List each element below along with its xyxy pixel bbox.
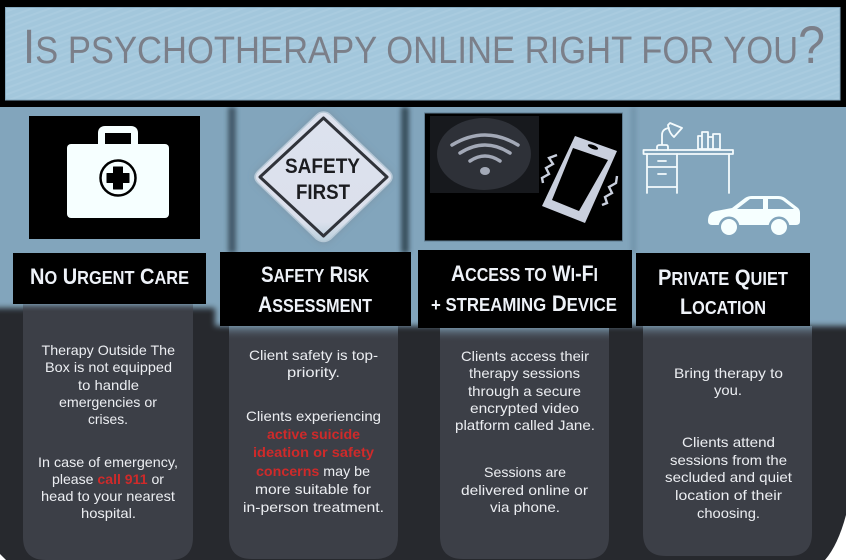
title banner [0, 0, 846, 107]
heading: no urgent care: NO URGENT CARE [30, 264, 189, 289]
heading: safety risk assessment: SAFETY RISK [261, 262, 369, 287]
body card: no urgent care: Therapy Outside The [42, 343, 175, 358]
icon: car [708, 196, 800, 238]
body card: private location: secluded and quiet [665, 470, 792, 485]
icon: safety first sign: FIRST [296, 180, 350, 204]
body card: no urgent care: hospital. [81, 506, 136, 521]
heading: access to wi-fi [418, 250, 632, 328]
icon: first aid kit [29, 116, 200, 239]
body card: no urgent care: to handle [78, 378, 139, 393]
body card: no urgent care: In case of emergency, [38, 455, 178, 470]
panel: private quiet location [636, 123, 812, 556]
heading: private quiet location: LOCATION [680, 294, 766, 319]
body card: wi-fi: via phone. [490, 500, 560, 515]
body card: wi-fi: delivered online or [461, 483, 589, 498]
body card: private location: choosing. [697, 506, 760, 521]
body card: private location [643, 326, 812, 556]
body card: wi-fi: Sessions are [484, 465, 566, 480]
body card: safety [229, 326, 398, 559]
body card: safety: priority. [287, 365, 340, 380]
body card: safety: concerns may be [256, 464, 370, 479]
body card: wi-fi: platform called Jane. [455, 418, 595, 433]
icon: wi-fi and vibrating phone [424, 113, 622, 241]
body card: private location: Bring therapy to [674, 366, 783, 381]
body card: no urgent care: Box is not equipped [45, 360, 172, 375]
heading: access to wi-fi: + STREAMING DEVICE [431, 291, 617, 316]
heading: private quiet location [636, 253, 810, 326]
body card: safety: Clients experiencing [246, 409, 381, 424]
body card: private location: sessions from the [670, 453, 787, 468]
heading: access to wi-fi: ACCESS TO WI-FI [451, 261, 598, 286]
body card: wi-fi: through a secure [468, 384, 581, 399]
body card: private location: you. [714, 383, 742, 398]
heading: private quiet location: PRIVATE QUIET [658, 265, 788, 290]
icon: safety first sign [255, 112, 392, 242]
panel: safety risk assessment [220, 112, 411, 559]
body card: no urgent care: please call 911 or [52, 472, 164, 487]
icon: safety first sign: SAFETY [285, 154, 360, 178]
panel: no urgent care [13, 116, 206, 560]
body card: safety: more suitable for [255, 482, 372, 497]
body card: wi-fi: Clients access their [461, 349, 590, 364]
body card: safety: Client safety is top- [249, 348, 378, 363]
body card: wi-fi: encrypted video [470, 401, 579, 416]
body card: no urgent care [23, 304, 193, 560]
heading: safety risk assessment [220, 252, 411, 326]
body card: wi-fi: therapy sessions [469, 366, 580, 381]
body card: wi-fi [440, 328, 609, 559]
body card: no urgent care: emergencies or [59, 395, 157, 410]
body card: safety: in-person treatment. [243, 500, 384, 515]
icon: desk with lamp and books [644, 123, 733, 193]
panel: wi-fi and streaming device [418, 113, 632, 559]
body card: safety: ideation or safety [253, 445, 374, 460]
body card: safety: active suicide [267, 427, 360, 442]
body card: private location: Clients attend [682, 435, 775, 450]
body card: no urgent care: head to your nearest [41, 489, 175, 504]
heading: safety risk assessment: ASSESSMENT [258, 292, 372, 317]
body card: private location: location of their [675, 488, 783, 503]
heading: no urgent care [13, 253, 206, 304]
body card: no urgent care: crises. [88, 412, 128, 427]
